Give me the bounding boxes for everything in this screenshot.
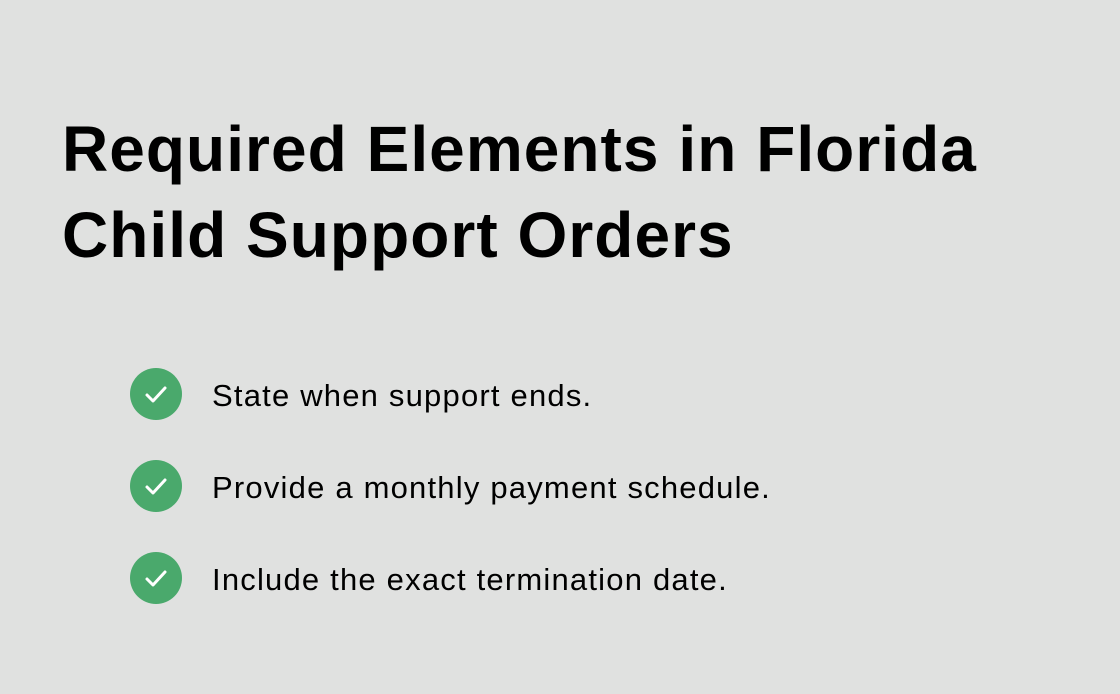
icon: check [130,460,182,512]
item 2 [130,460,771,512]
icon: check [130,552,182,604]
title [62,113,977,271]
title: Child Support Orders [62,199,734,271]
text: Provide a monthly payment schedule. [212,470,771,505]
text: State when support ends. [212,378,592,413]
item 3 [130,552,728,604]
text: Include the exact termination date. [212,562,728,597]
icon: check [130,368,182,420]
title: Required Elements in Florida [62,113,977,185]
item 1 [130,368,592,420]
